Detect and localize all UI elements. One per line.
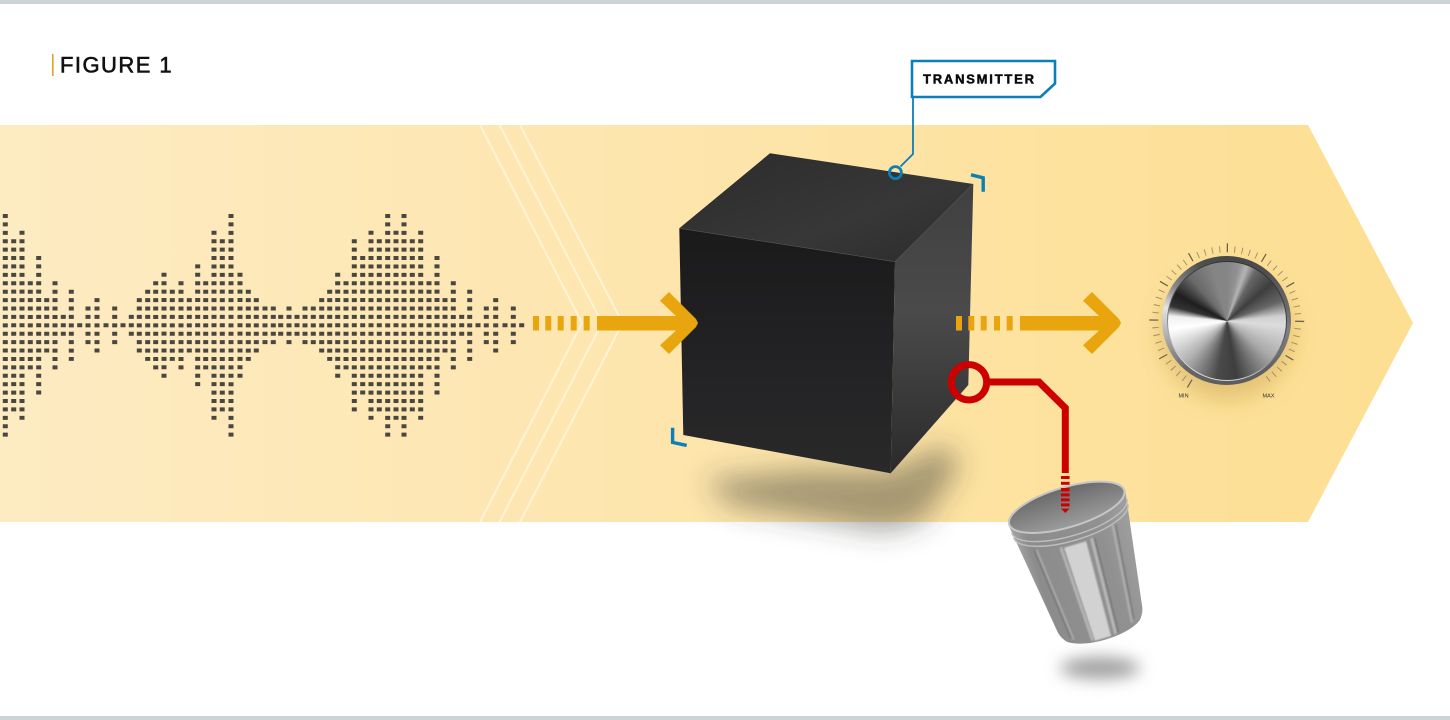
top rule [0,0,1450,4]
bottom rule [0,716,1450,720]
transmitter callout: TRANSMITTER [923,72,1035,87]
red reject line and ring [951,365,1070,513]
signal path arrow band [0,125,1413,522]
transmitter callout [889,61,1055,179]
knob MAX label: MAX [1263,394,1275,400]
chevron break lines [480,125,622,522]
knob: brushed metal dial [1162,256,1291,385]
knob scale ticks [1154,248,1300,384]
knob MIN label: MIN [1178,394,1189,400]
blue corner brackets [673,175,983,445]
input arrow [533,292,698,354]
cube drop shadow [705,445,960,532]
icon: black box cube [679,153,973,473]
trash can drop shadow [1060,657,1140,679]
waveform dot columns [5,214,522,437]
knob glow shadow [1161,268,1293,400]
icon: trash can [1003,471,1164,657]
output arrow [956,292,1121,354]
title: FIGURE 1: FIGURE 1 [60,52,173,77]
